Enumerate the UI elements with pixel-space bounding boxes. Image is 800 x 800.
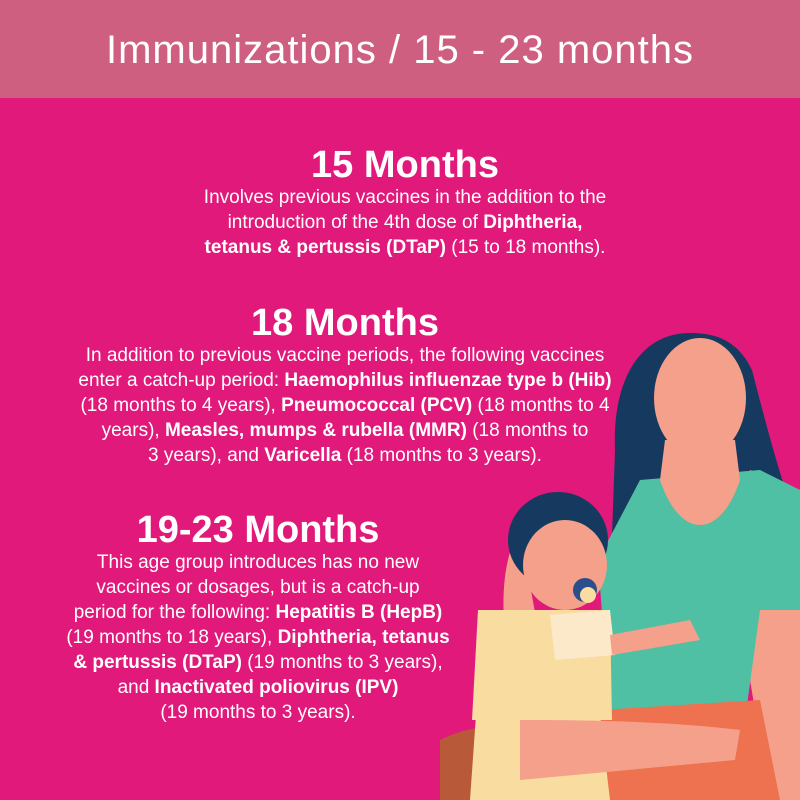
block: 15 months: introduction of the 4th dose of Diphtheria, <box>228 212 582 233</box>
block: 18 months: (18 months to 4 years), Pneumococcal (PCV) (18 months to 4 <box>80 395 610 416</box>
title band: Immunizations / 15 - 23 months <box>106 28 694 72</box>
block: 15 months: tetanus & pertussis (DTaP) (15 to 18 months). <box>205 237 605 258</box>
block: 18 months: 3 years), and Varicella (18 months to 3 years). <box>148 445 542 466</box>
block: 19-23 months <box>66 509 450 723</box>
block: 19-23 months: 19-23 Months <box>137 509 379 551</box>
block: 19-23 months: (19 months to 18 years), Diphtheria, tetanus <box>66 627 450 648</box>
child <box>470 492 740 800</box>
block: 15 months <box>204 144 606 258</box>
block: 19-23 months: period for the following: Hepatitis B (HepB) <box>74 602 442 623</box>
block: 19-23 months: This age group introduces has no new <box>97 552 419 573</box>
block: 18 months: years), Measles, mumps & rubella (MMR) (18 months to <box>102 420 588 441</box>
mother hair <box>608 333 800 650</box>
block: 19-23 months: (19 months to 3 years). <box>160 702 356 723</box>
title band <box>0 0 800 98</box>
block: 15 months: Involves previous vaccines in the addition to the <box>204 187 606 208</box>
block: 19-23 months: & pertussis (DTaP) (19 months to 3 years), <box>73 652 443 673</box>
block: 18 months: In addition to previous vaccine periods, the following vaccines <box>86 345 604 366</box>
block: 19-23 months: vaccines or dosages, but is a catch-up <box>96 577 420 598</box>
block: 19-23 months: and Inactivated poliovirus (IPV) <box>118 677 398 698</box>
block: 15 months: 15 Months <box>311 144 499 186</box>
mother body <box>440 338 800 800</box>
block: 18 months: 18 Months <box>251 302 439 344</box>
block: 18 months: enter a catch-up period: Haemophilus influenzae type b (Hib) <box>78 370 612 391</box>
block: 18 months <box>78 302 612 466</box>
